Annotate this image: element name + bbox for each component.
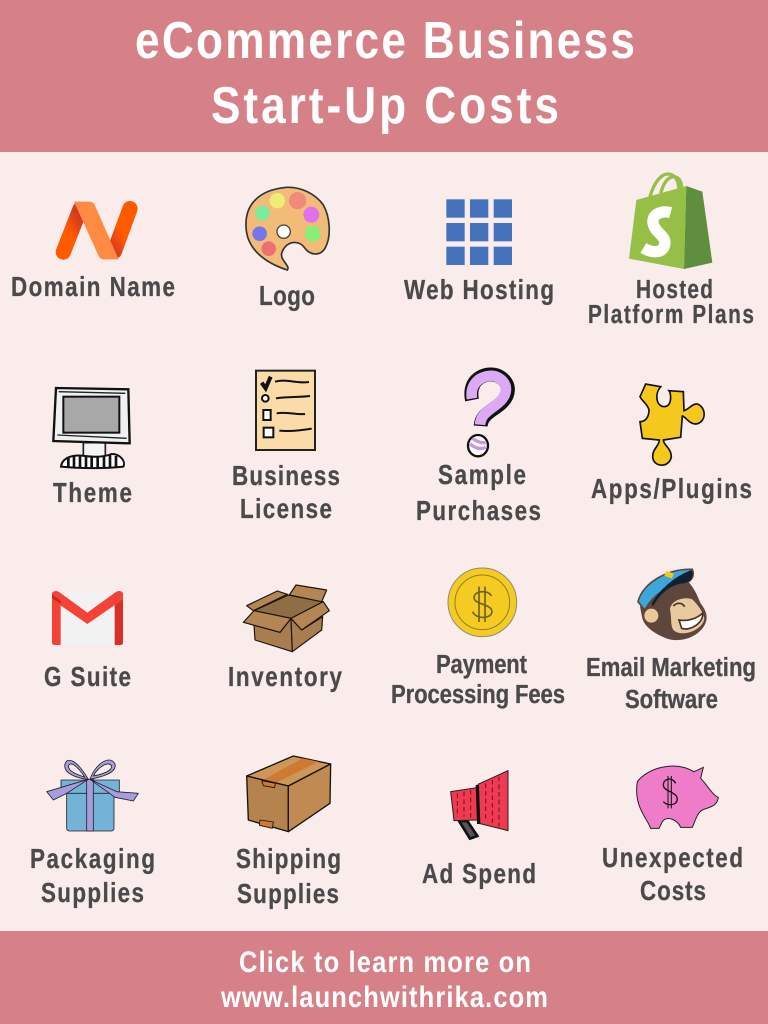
label: Theme [53,478,132,509]
label [30,844,155,909]
label: Packaging [30,844,155,875]
item: Web Hosting [404,199,554,306]
label [602,843,743,907]
icon: shopping bag [629,174,712,269]
label: Processing Fees [391,680,565,709]
label: Platform Plans [588,300,754,329]
footer call to action: Click to learn more on [239,945,531,978]
item: Packaging Supplies [30,760,155,909]
label: Costs [640,876,706,907]
title [135,12,635,135]
label: Purchases [416,496,541,527]
footer call to action: www.launchwithrika.com [220,980,548,1013]
item: Email Marketing Software [586,569,756,714]
label: Domain Name [11,272,175,303]
item: Inventory [228,585,342,693]
label: License [240,494,332,525]
item: G Suite [44,591,131,693]
icon: computer monitor [53,388,130,468]
label [232,461,340,525]
icon: pink piggy bank [637,766,718,828]
icon: gold dollar coin [448,568,517,637]
icon: gift box with bow [47,760,138,831]
footer banner [0,931,768,1024]
icon: paint palette [246,187,329,270]
label: Logo [259,281,315,312]
label: Software [625,685,718,714]
header banner [0,0,768,152]
label [586,653,756,714]
label [391,650,565,709]
label [416,460,541,527]
label: Shipping [236,844,341,875]
footer call to action [220,945,548,1013]
icon: blue grid [446,199,512,265]
label [236,844,341,910]
item: Hosted Platform Plans [588,174,754,329]
item: Payment Processing Fees [391,568,565,709]
item: Unexpected Costs [602,766,743,907]
title: eCommerce Business [135,12,635,70]
icon: puzzle piece [640,384,704,465]
icon: red M envelope [52,591,123,645]
icon: red megaphone [451,771,508,839]
title: Start-Up Costs [211,77,559,135]
item: Shipping Supplies [236,756,341,910]
item: Domain Name [11,202,175,303]
item: Business License [232,371,340,525]
icon: orange N logo [63,202,130,259]
icon: checklist [256,371,315,450]
label: Sample [438,460,526,491]
label: Ad Spend [422,859,536,890]
icon: monkey mascot with cap [638,569,707,640]
item: Sample Purchases [416,374,541,527]
label: Email Marketing [586,653,756,682]
label: Supplies [237,879,339,910]
label: Web Hosting [404,275,554,306]
item: Apps/Plugins [591,384,752,505]
label: Inventory [228,662,342,693]
icon: question mark [468,374,508,456]
label: G Suite [44,662,131,693]
label: Hosted [636,275,713,304]
label: Payment [436,650,527,679]
label: Business [232,461,340,492]
label: Supplies [41,878,144,909]
label [588,275,754,329]
icon: open cardboard box [243,585,329,652]
label: Unexpected [602,843,743,874]
label: Apps/Plugins [591,474,752,505]
item: Ad Spend [422,771,536,890]
item: Logo [246,187,329,312]
icon: closed shipping box [247,756,331,832]
item: Theme [53,388,132,509]
